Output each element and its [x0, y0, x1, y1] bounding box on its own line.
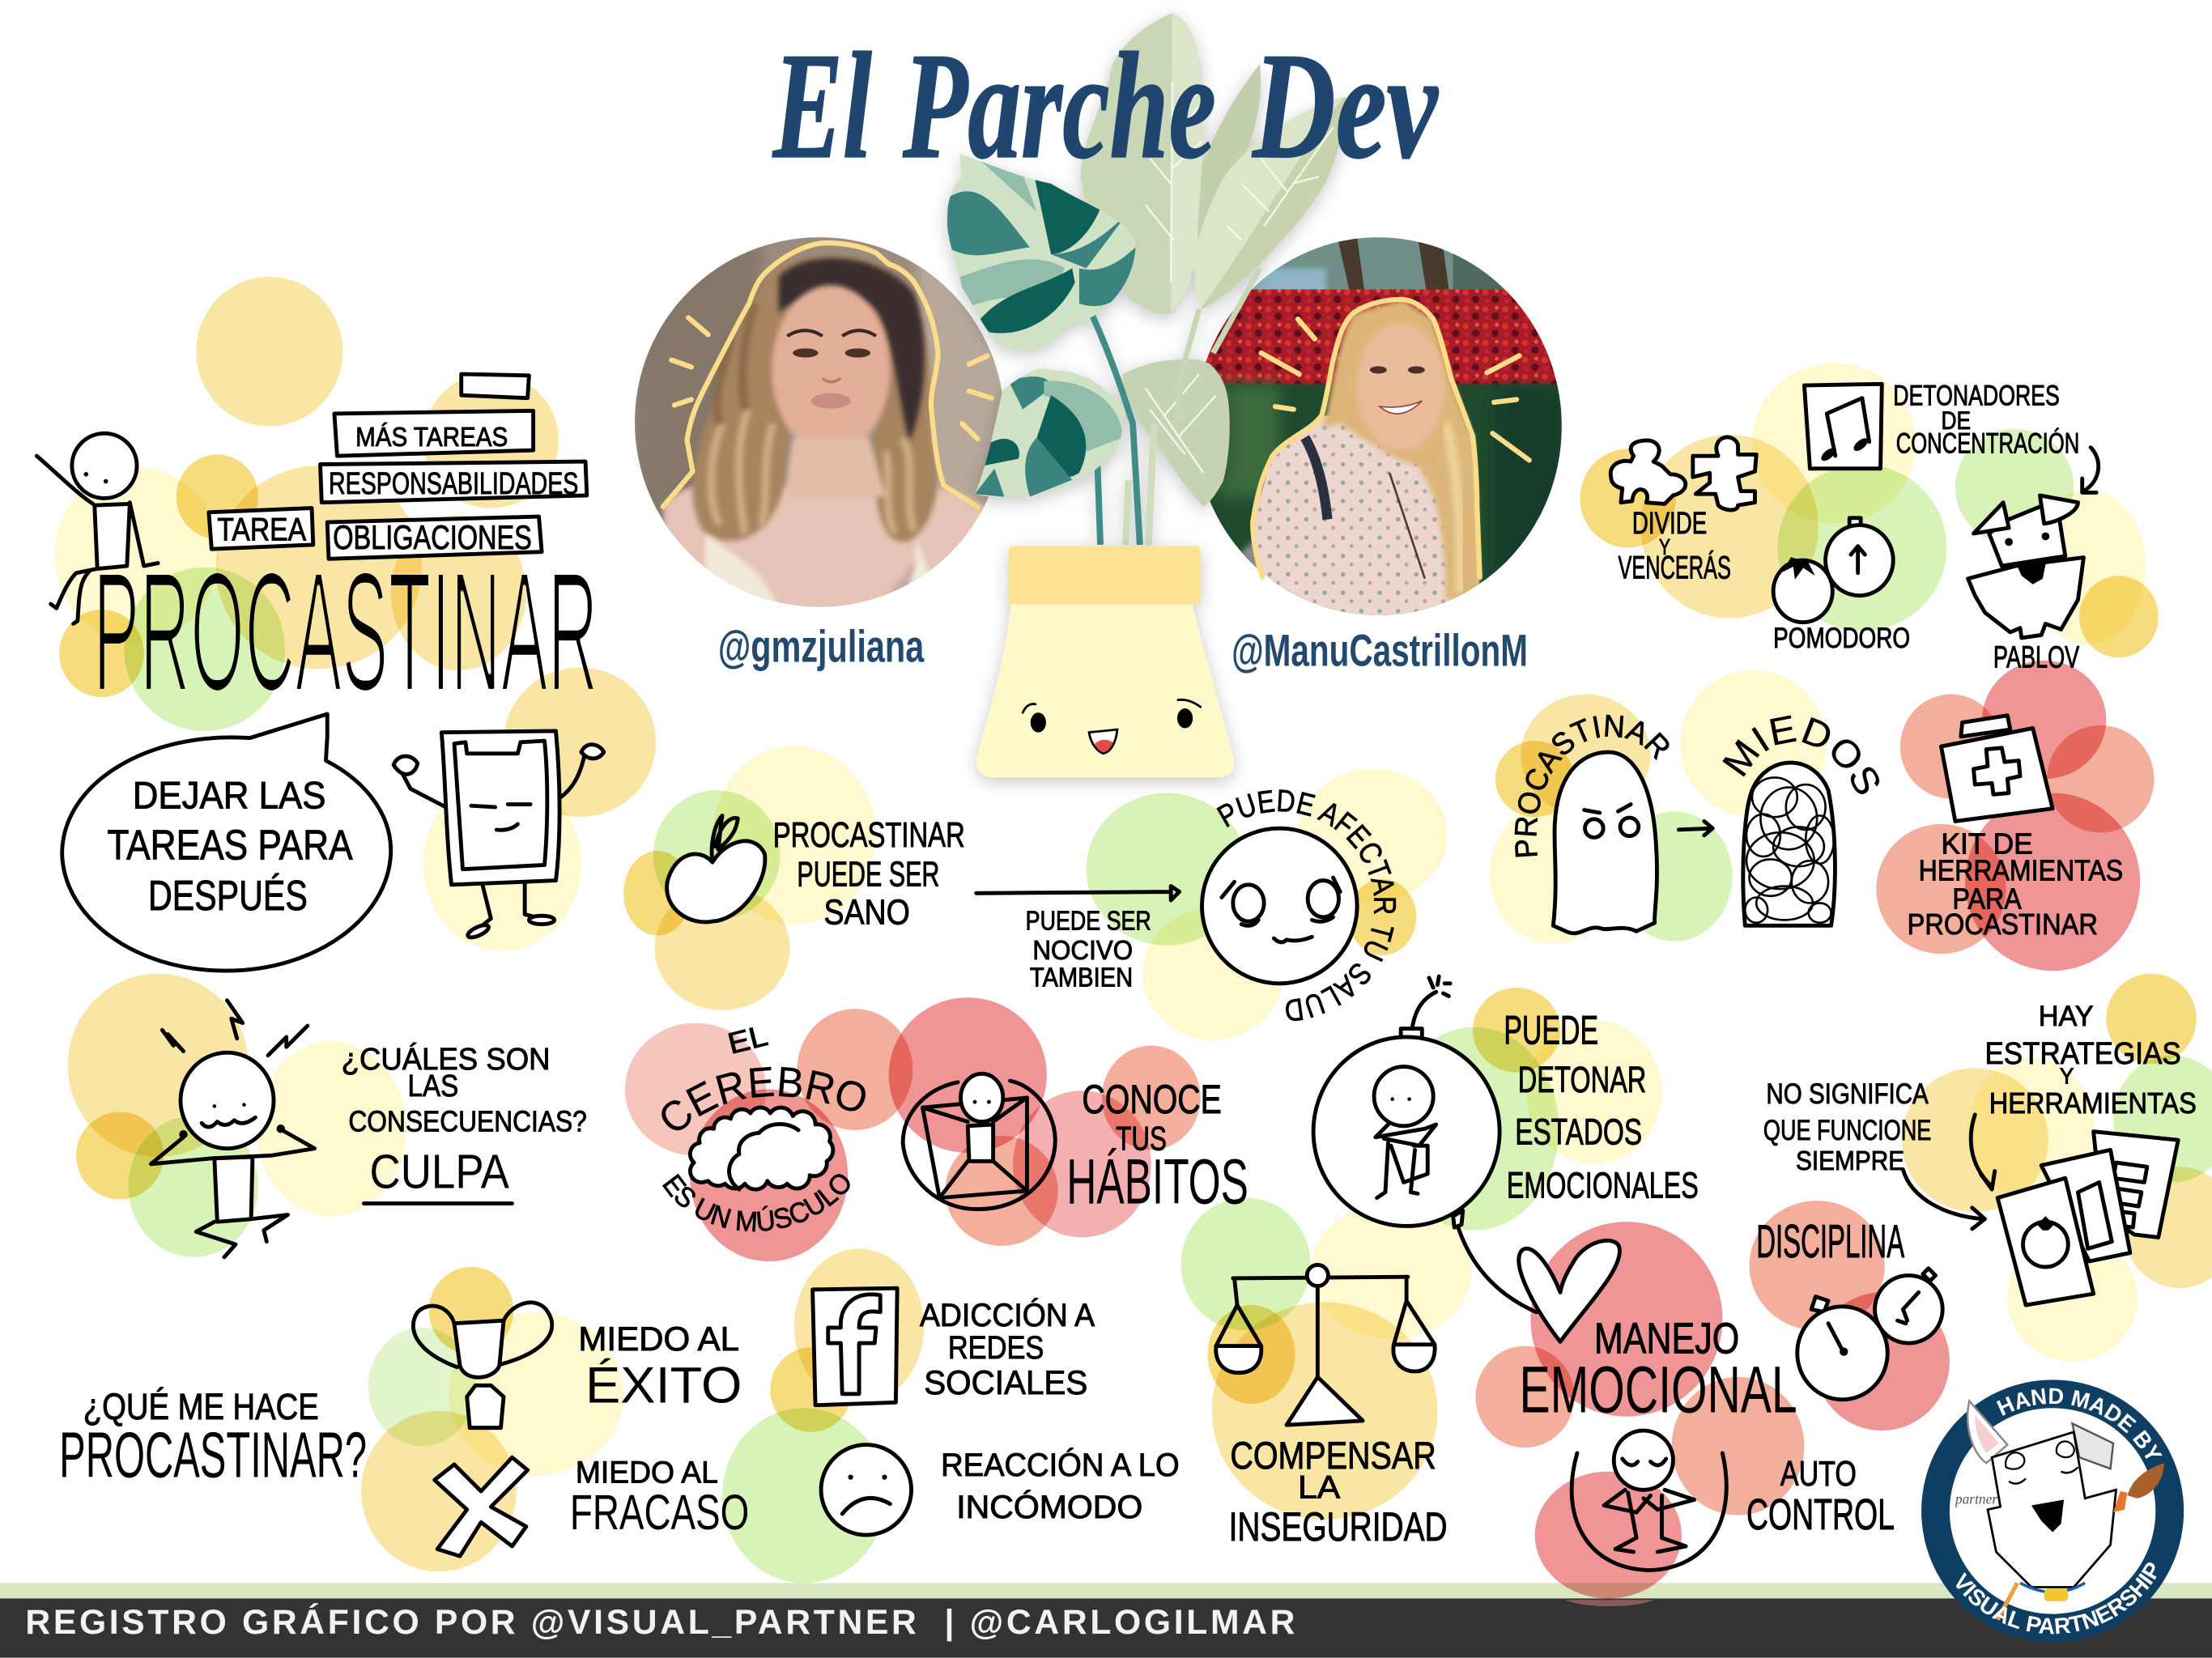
text: miedo al fracaso: FRACASO: [570, 1485, 749, 1540]
stacked task boxes: RESPONSABILIDADES: [329, 466, 578, 501]
badge: visual partnership: HAND MADE BY: [1997, 1388, 2163, 1459]
text: conoce tus hábitos: CONOCE: [1082, 1076, 1222, 1122]
apple with text: [667, 815, 965, 933]
text: miedo al éxito: ÉXITO: [585, 1357, 742, 1414]
icon: facebook: [813, 1288, 897, 1405]
handle: ManuCastrillonM: @ManuCastrillonM: [1231, 626, 1528, 676]
title: Parche: [902, 21, 1216, 190]
badge: visual partnership: VISUAL PARTNERSHIP: [1956, 1562, 2157, 1634]
text: manejo emocional: [1520, 1314, 1797, 1426]
icon: heart: [1519, 1240, 1619, 1341]
text: manejo emocional: EMOCIONAL: [1520, 1353, 1797, 1426]
text: disciplina: DISCIPLINA: [1756, 1216, 1905, 1268]
stick figure with lightning: [151, 1001, 315, 1257]
icon: phone character: [393, 731, 604, 940]
text: PROCASTINAR: [93, 538, 598, 726]
icon: balance scale: [1216, 1265, 1435, 1425]
text: pomodoro: POMODORO: [1773, 623, 1910, 654]
text: no significa: [1763, 1078, 1931, 1176]
speech bubble: dejar las tareas: [62, 714, 391, 971]
text: manejo emocional: MANEJO: [1594, 1314, 1739, 1363]
icon: strategy cards: [1997, 1132, 2178, 1305]
text: puede detonar estados emocionales: EMOCIONALES: [1507, 1165, 1699, 1206]
text: conoce tus hábitos: TUS: [1116, 1119, 1167, 1157]
brain with curved text: [661, 1018, 866, 1232]
apple with text: PROCASTINAR: [773, 816, 965, 855]
icon: music note: [1804, 384, 1882, 469]
text: detonadores de concentración: [1893, 380, 2079, 460]
brain with curved text: CEREBRO: [661, 1067, 866, 1130]
speech bubble: dejar las tareas: DEJAR LAS: [133, 774, 325, 817]
worried face with curved text: PUEDE AFECTAR TU SALUD: [1216, 789, 1396, 1022]
text: auto control: [1746, 1455, 1895, 1539]
text: compensar la inseguridad: COMPENSAR: [1230, 1434, 1436, 1477]
title: Dev: [1252, 21, 1439, 190]
text: consecuencias, culpa: [342, 1042, 587, 1204]
highlight outline and rays: @ManuCastrillonM: [1253, 300, 1529, 577]
text: compensar la inseguridad: LA: [1298, 1470, 1341, 1506]
text: miedo al éxito: MIEDO AL: [578, 1320, 739, 1358]
stacked task boxes: TAREA: [217, 512, 306, 548]
tangled dome with miedos: [1722, 716, 1880, 928]
footer bar: [0, 1583, 2212, 1658]
title: El: [772, 21, 872, 190]
text: puede ser nocivo: [1026, 907, 1151, 993]
text: qué me hace procastinar: PROCASTINAR?: [59, 1418, 367, 1491]
footer credit text: REGISTRO GRÁFICO POR @VISUAL_PARTNER | @CARLOGILMAR: [25, 1603, 1295, 1642]
text: hay estrategias: ESTRATEGIAS: [1984, 1036, 2181, 1071]
badge: visual partnership: [1921, 1380, 2184, 1642]
text: hay estrategias: [1984, 1001, 2197, 1120]
brain with curved text: EL: [725, 1018, 771, 1061]
text: kit de herramientas: PROCASTINAR: [1908, 908, 2098, 941]
stacked task boxes: OBLIGACIONES: [333, 518, 532, 556]
text: kit de herramientas: KIT DE: [1941, 827, 2033, 860]
text: divide y vencerás: VENCERÁS: [1618, 550, 1731, 586]
pot with cute face: [976, 546, 1235, 777]
text: conoce tus hábitos: [1066, 1076, 1249, 1218]
sitting stick figure: [36, 433, 158, 623]
text: puede detonar estados emocionales: PUEDE: [1504, 1007, 1598, 1053]
text: consecuencias, culpa: CULPA: [369, 1144, 509, 1198]
text: qué me hace procastinar: ¿QUÉ ME HACE: [83, 1386, 319, 1427]
text: miedo al éxito: [578, 1320, 742, 1414]
text: puede ser nocivo: NOCIVO: [1032, 936, 1133, 966]
text: reacción a lo incómodo: INCÓMODO: [956, 1489, 1142, 1525]
icon: meditating figure: [1572, 1431, 1726, 1571]
text: kit de herramientas: HERRAMIENTAS: [1919, 854, 2123, 887]
icon: first aid kit: [1941, 716, 2052, 821]
text: compensar la inseguridad: [1229, 1434, 1448, 1550]
photo: @ManuCastrillonM: [1195, 237, 1566, 623]
text: hay estrategias: HAY: [2039, 1001, 2094, 1032]
text: puede detonar estados emocionales: [1504, 1007, 1699, 1206]
text: reacción a lo incómodo: [941, 1447, 1180, 1525]
icon: sad face: [821, 1445, 912, 1535]
tangled dome with miedos: MIEDOS: [1722, 716, 1880, 794]
text: detonadores de concentración: DE: [1941, 406, 1971, 435]
text: kit de herramientas: PARA: [1952, 882, 2022, 915]
text: adicción a redes sociales: REDES: [948, 1330, 1044, 1366]
photo: @gmzjuliana: [635, 237, 1015, 621]
stacked task boxes: MÁS TAREAS: [355, 423, 508, 453]
text: consecuencias, culpa: CONSECUENCIAS?: [348, 1105, 587, 1138]
badge: visual partnership: partner: [1954, 1491, 1997, 1507]
speech bubble: dejar las tareas: TAREAS PARA: [107, 822, 353, 869]
ghost with curved text: [1514, 714, 1670, 936]
arrow: to harmful: [976, 886, 1180, 900]
bomb balloon figure: [1313, 976, 1536, 1312]
text: reacción a lo incómodo: REACCIÓN A LO: [941, 1447, 1180, 1483]
panel: puzzle pieces: [1610, 437, 1756, 510]
title: [772, 21, 1439, 190]
text: detonadores de concentración: DETONADORES: [1893, 380, 2060, 411]
icon: stopwatches: [1797, 1269, 1942, 1400]
arrows to cards: [1903, 1115, 1995, 1229]
arrow: ghost to tangle: [1678, 821, 1712, 835]
text: adicción a redes sociales: SOCIALES: [924, 1363, 1087, 1401]
text: compensar la inseguridad: INSEGURIDAD: [1229, 1503, 1448, 1550]
apple with text: PUEDE SER: [797, 856, 939, 895]
text: qué me hace procastinar: [59, 1386, 367, 1491]
text: consecuencias, culpa: ¿CUÁLES SON: [342, 1042, 551, 1077]
text: miedo al fracaso: MIEDO AL: [576, 1456, 718, 1490]
text: pablov: PABLOV: [1993, 640, 2080, 675]
handle: gmzjuliana: @gmzjuliana: [718, 622, 925, 672]
text: consecuencias, culpa: LAS: [408, 1069, 458, 1103]
text: auto control: CONTROL: [1746, 1490, 1895, 1539]
text: hay estrategias: Y: [2060, 1063, 2074, 1088]
icon: trophy: [413, 1303, 552, 1428]
apple with text: SANO: [824, 894, 910, 933]
text: miedo al fracaso: [570, 1456, 749, 1540]
arrow to dog: [2082, 448, 2099, 492]
pot face: [1023, 699, 1201, 754]
text: conoce tus hábitos: HÁBITOS: [1066, 1146, 1249, 1218]
icon: cross: [435, 1457, 528, 1556]
text: puede ser nocivo: PUEDE SER: [1026, 907, 1151, 937]
text: divide y vencerás: [1618, 506, 1731, 586]
text: auto control: AUTO: [1780, 1455, 1857, 1494]
ghost with curved text: PROCASTINAR: [1514, 714, 1670, 857]
text: no significa: QUE FUNCIONE: [1763, 1115, 1931, 1146]
text: divide y vencerás: DIVIDE: [1632, 506, 1707, 541]
text: puede detonar estados emocionales: ESTADOS: [1515, 1111, 1642, 1152]
stacked task boxes: [209, 374, 587, 559]
text: puede ser nocivo: TAMBIEN: [1030, 963, 1133, 993]
text: detonadores de concentración: CONCENTRACIÓN: [1896, 428, 2079, 460]
brain with curved text: ES UN MÚSCULO: [662, 1174, 850, 1232]
text: no significa: SIEMPRE: [1796, 1146, 1904, 1176]
highlight outline and rays: @gmzjuliana: [663, 243, 992, 507]
text: no significa: NO SIGNIFICA: [1766, 1078, 1929, 1110]
speech bubble: dejar las tareas: DESPUÉS: [148, 873, 308, 920]
icon: dog pablov: [1968, 495, 2083, 638]
panel: procastinar heading: [36, 374, 598, 726]
plant: [931, 13, 1346, 545]
background colour blobs: [55, 277, 2212, 1598]
text: adicción a redes sociales: ADICCIÓN A: [920, 1297, 1095, 1333]
badge dog: [1967, 1401, 2164, 1620]
icon: vitruvian figure: [903, 1073, 1055, 1209]
text: adicción a redes sociales: [920, 1297, 1095, 1401]
text: kit de herramientas: [1908, 827, 2123, 941]
icon: pomodoro timers: [1773, 518, 1893, 623]
text: divide y vencerás: Y: [1659, 534, 1670, 559]
text: puede detonar estados emocionales: DETONAR: [1518, 1059, 1646, 1100]
